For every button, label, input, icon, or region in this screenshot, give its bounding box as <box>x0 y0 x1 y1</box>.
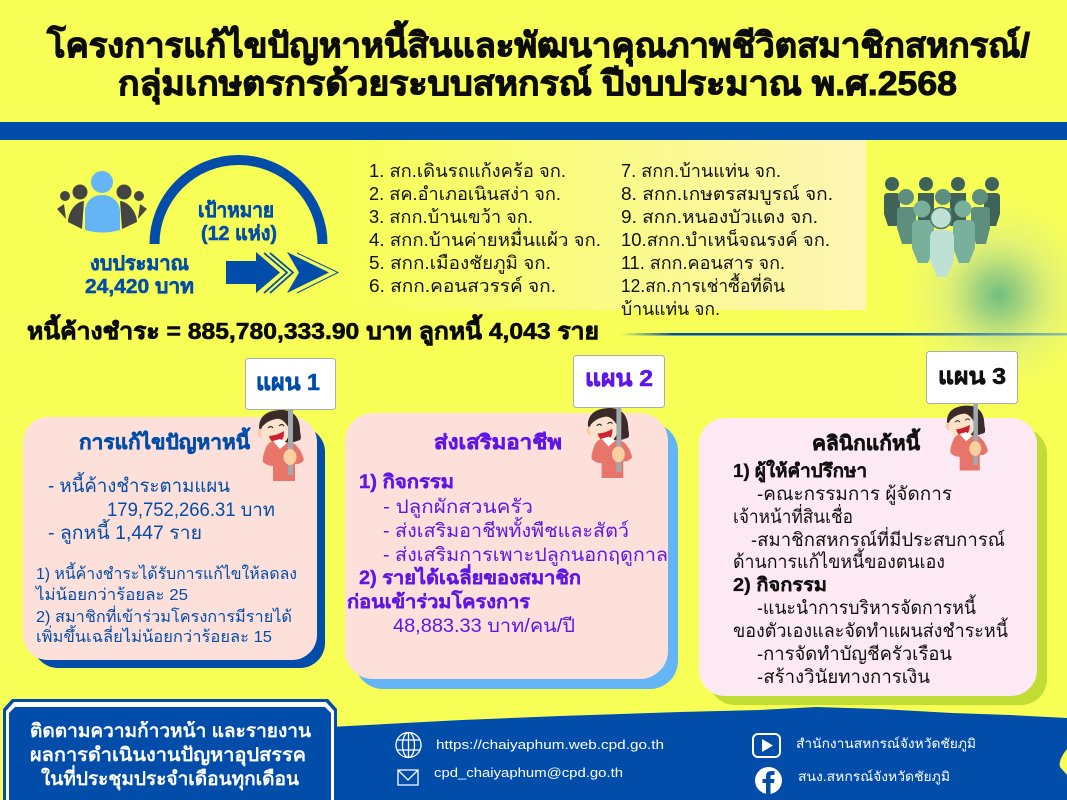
list: cooperatives 7-12: 11. สกก.คอนสาร จก. <box>621 253 785 273</box>
list: cooperatives 7-12: 10.สกก.บำเหน็จณรงค์ จก. <box>621 228 830 250</box>
title <box>46 20 1031 105</box>
panel 2 body: ก่อนเข้าร่วมโครงการ <box>347 590 531 613</box>
footer corner accent <box>1060 749 1067 775</box>
panel 1 goals: ไม่น้อยกว่าร้อยละ 25 <box>34 585 188 604</box>
sign: plan 3: แผน 3 <box>938 363 1006 389</box>
panel 3 body: -คณะกรรมการ ผู้จัดการ <box>757 483 952 505</box>
panel 3 body: ของตัวเองและจัดทำแผนส่งชำระหนี้ <box>733 617 1008 641</box>
panel 3 body: 2) กิจกรรม <box>733 574 827 595</box>
footer wave <box>330 707 1067 800</box>
title: โครงการแก้ไขปัญหาหนี้สินและพัฒนาคุณภาพชีวิตสมาชิกสหกรณ์/ <box>46 20 1031 67</box>
sign: plan 1: แผน 1 <box>256 369 320 395</box>
panel 1 card <box>23 417 317 660</box>
panel: plan 1 <box>23 358 336 668</box>
icon: facebook <box>755 767 782 794</box>
sign: plan 2: แผน 2 <box>585 365 653 391</box>
list: cooperatives 7-12: 8. สกก.เกษตรสมบูรณ์ จก. <box>621 184 833 205</box>
panel: plan 2 <box>345 356 678 689</box>
title: กลุ่มเกษตรกรด้วยระบบสหกรณ์ ปีงบประมาณ พ.ศ.2568 <box>118 64 957 105</box>
icon: target arc <box>154 160 322 244</box>
panel 1 goals: เพิ่มขึ้นเฉลี่ยไม่น้อยกว่าร้อยละ 15 <box>36 625 272 646</box>
sign: plan 2 <box>574 356 664 408</box>
panel 3 body: -สร้างวินัยทางการเงิน <box>757 666 930 687</box>
panel 3 body <box>733 459 1008 687</box>
panel 2 shadow <box>355 423 678 689</box>
panel 2 body: - ปลูกผักสวนครัว <box>383 497 533 518</box>
panel 2 card <box>345 413 668 679</box>
email address: cpd_chaiyaphum@cpd.go.th <box>434 765 623 780</box>
list: cooperatives 1-6: 4. สกก.บ้านค่ายหมื่นแผ้ว จก. <box>369 227 601 250</box>
list: cooperatives 7-12: 7. สกก.บ้านแท่น จก. <box>621 161 781 181</box>
list: cooperatives 1-6: 6. สกก.คอนสวรรค์ จก. <box>369 276 556 296</box>
icon: video <box>753 734 780 757</box>
list: cooperatives 1-6: 1. สก.เดินรถแก้งคร้อ จก. <box>369 161 566 181</box>
sign: plan 1 <box>246 358 336 410</box>
icon: budget people <box>57 171 147 232</box>
panel 2 heading: ส่งเสริมอาชีพ <box>434 431 562 454</box>
panel 2 body <box>347 472 668 637</box>
panel 1 goals <box>34 562 297 646</box>
list: cooperatives 7-12 <box>621 161 833 319</box>
budget label <box>85 253 194 298</box>
follow-up text: ติดตามความก้าวหน้า และรายงาน <box>30 720 311 742</box>
panel 1 heading: การแก้ไขปัญหาหนี้ <box>79 427 251 454</box>
follow-up box <box>3 699 337 800</box>
panel 3 body: -แนะนำการบริหารจัดการหนี้ <box>757 594 976 618</box>
icon: member crowd <box>884 177 1000 277</box>
list: cooperatives 7-12: 9. สกก.หนองบัวแดง จก. <box>621 207 818 227</box>
panel 1 debt figures <box>48 472 275 544</box>
cooperative list backdrop <box>350 140 866 310</box>
panel 3 body: เจ้าหน้าที่สินเชื่อ <box>733 504 853 527</box>
panel 2 body: - ส่งเสริมการเพาะปลูกนอกฤดูกาล <box>383 545 668 566</box>
panel 2 body: 2) รายได้เฉลี่ยของสมาชิก <box>359 564 581 589</box>
underline <box>620 333 1067 336</box>
facebook page name: สนง.สหกรณ์จังหวัดชัยภูมิ <box>798 769 950 785</box>
target label: เป้าหมาย <box>198 199 274 222</box>
panel 3 heading: คลินิกแก้หนี้ <box>812 428 921 455</box>
panel 3 card <box>699 418 1037 696</box>
icon: woman holding sign 3 <box>946 404 988 470</box>
panel 2 body: - ส่งเสริมอาชีพทั้งพืชและสัตว์ <box>383 517 629 542</box>
icon: woman holding sign 2 <box>586 406 632 478</box>
panel 3 shadow <box>709 428 1047 705</box>
panel 3 body: ด้านการแก้ไขหนี้ของตนเอง <box>733 548 945 572</box>
budget label: งบประมาณ <box>90 253 189 275</box>
panel 1 shadow <box>33 427 325 668</box>
blue header band <box>0 122 1067 140</box>
panel 3 body: 1) ผู้ให้คำปรึกษา <box>733 459 867 483</box>
icon: globe <box>396 732 421 758</box>
list: cooperatives 1-6: 3. สกก.บ้านเขว้า จก. <box>369 207 533 227</box>
panel 1 debt figures: - หนี้ค้างชำระตามแผน <box>48 472 230 497</box>
arrow <box>226 252 338 293</box>
icon: mail <box>398 770 418 785</box>
list: cooperatives 7-12: 12.สก.การเช่าซื้อที่ดิน <box>621 273 785 296</box>
office name: สำนักงานสหกรณ์จังหวัดชัยภูมิ <box>796 736 976 752</box>
green glow <box>899 195 1067 395</box>
list: cooperatives 1-6: 2. สค.อำเภอเนินสง่า จก. <box>369 184 561 204</box>
list: cooperatives 1-6: 5. สกก.เมืองชัยภูมิ จก. <box>369 253 551 274</box>
icon: woman holding sign 1 <box>258 408 304 481</box>
list: cooperatives 1-6 <box>369 161 601 296</box>
debt summary: หนี้ค้างชำระ = 885,780,333.90 บาท ลูกหนี้ 4,043 ราย <box>27 314 599 346</box>
follow-up text <box>30 720 311 791</box>
follow-up text: ในที่ประชุมประจำเดือนทุกเดือน <box>41 765 299 791</box>
panel 1 debt figures: - ลูกหนี้ 1,447 ราย <box>48 519 202 544</box>
panel 3 body: -สมาชิกสหกรณ์ที่มีประสบการณ์ <box>751 527 1005 550</box>
follow-up text: ผลการดำเนินงานปัญหาอุปสรรค <box>30 745 306 767</box>
panel 1 goals: 1) หนี้ค้างชำระได้รับการแก้ไขให้ลดลง <box>36 562 297 583</box>
panel 3 body: -การจัดทำบัญชีครัวเรือน <box>757 643 952 665</box>
target label: (12 แห่ง) <box>201 223 277 245</box>
panel 2 body: 48,883.33 บาท/คน/ปี <box>393 615 575 637</box>
budget label: 24,420 บาท <box>85 276 194 298</box>
panel 1 debt figures: 179,752,266.31 บาท <box>107 500 275 521</box>
target label <box>198 199 277 245</box>
panel 1 goals: 2) สมาชิกที่เข้าร่วมโครงการมีรายได้ <box>36 605 292 626</box>
website url: https://chaiyaphum.web.cpd.go.th <box>436 737 664 752</box>
panel: plan 3 <box>699 352 1047 705</box>
list: cooperatives 7-12: บ้านแท่น จก. <box>621 299 720 319</box>
sign: plan 3 <box>926 352 1018 404</box>
panel 2 body: 1) กิจกรรม <box>359 472 454 493</box>
